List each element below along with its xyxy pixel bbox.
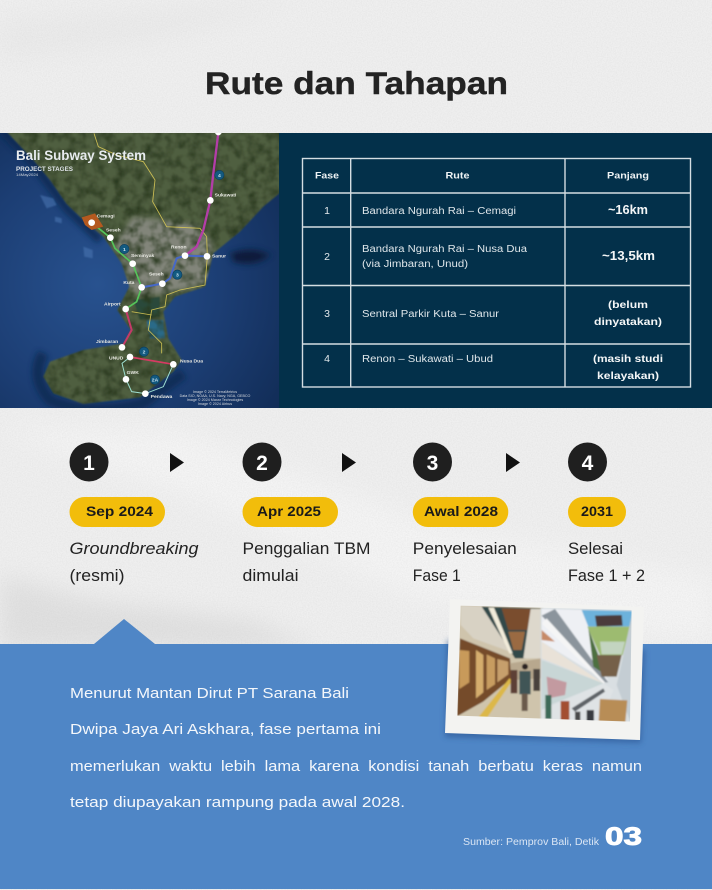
map title: 14May2024 <box>16 173 38 177</box>
map station labels: Nusa Dua <box>180 359 203 365</box>
table lengths: dinyatakan) <box>594 316 662 328</box>
table: route phases <box>302 158 690 387</box>
step 4: fase 1 + 2: Selesai <box>568 540 623 558</box>
paragraph text: Menurut Mantan Dirut PT Sarana Bali <box>70 685 349 702</box>
table header: Rute <box>446 170 470 182</box>
step 4: fase 1 + 2: 4 <box>582 452 594 475</box>
table phase numbers: 2 <box>324 251 330 263</box>
step 3: fase 1: Awal 2028 <box>424 504 499 519</box>
table lengths: kelayakan) <box>597 370 659 382</box>
arrow 3 <box>506 453 520 472</box>
map yellow boundaries <box>94 133 207 353</box>
map station labels: Seseh <box>149 272 164 278</box>
map station dots <box>88 129 222 397</box>
step 3: fase 1: 3 <box>427 452 438 475</box>
map: Bali Subway System: 2 <box>143 350 146 356</box>
map: Bali Subway System: 4 <box>218 173 221 179</box>
table routes: (via Jimbaran, Unud) <box>362 259 468 270</box>
map station labels: Pendawa <box>151 394 173 400</box>
map station labels: Sanur <box>212 254 226 260</box>
map credits: Image © 2024 Airbus <box>198 402 232 406</box>
map title <box>16 148 146 177</box>
map route lines <box>92 133 218 394</box>
map station labels: Seseh <box>106 228 121 234</box>
step 1: groundbreaking: Sep 2024 <box>86 504 154 519</box>
map credits: Data SIO, NOAA, U.S. Navy, NGA, GEBCO <box>180 394 251 398</box>
arrow 2 <box>342 453 356 472</box>
table lengths: ~16km <box>608 202 648 217</box>
table phase numbers: 3 <box>324 308 330 320</box>
table lengths: (belum <box>608 299 648 311</box>
step 4: fase 1 + 2: 2031 <box>581 504 614 519</box>
table routes: Renon – Sukawati – Ubud <box>362 354 493 365</box>
step 3: fase 1: Fase 1 <box>413 567 461 585</box>
map: Bali Subway System: 3 <box>176 273 179 279</box>
step 3: fase 1: Penyelesaian <box>413 540 517 558</box>
photo card <box>445 599 645 743</box>
map: Bali Subway System: 2A <box>152 378 159 384</box>
table phase numbers <box>324 205 330 365</box>
table grid <box>302 158 690 387</box>
map station labels <box>96 193 237 400</box>
step 4: fase 1 + 2: Fase 1 + 2 <box>568 567 645 585</box>
map station labels: GWK <box>127 370 139 376</box>
map title: Bali Subway System <box>16 148 146 163</box>
map orange Cemagi marker <box>82 213 103 230</box>
photo image <box>453 603 633 723</box>
map credits: Image © 2024 Maxar Technologies <box>187 398 243 402</box>
table header: Fase <box>315 170 339 182</box>
step 1: groundbreaking: (resmi) <box>70 567 124 585</box>
source: Sumber: Pemprov Bali, Detik <box>463 837 600 848</box>
arrow 1 <box>170 453 184 472</box>
step 2: TBM: 2 <box>256 452 268 475</box>
map: Bali Subway System <box>0 129 283 410</box>
step 2: TBM: dimulai <box>242 567 298 585</box>
photo shadow <box>445 640 645 743</box>
panel: navy band <box>0 133 712 408</box>
table lengths <box>593 202 663 382</box>
paragraph text: Dwipa Jaya Ari Askhara, fase pertama ini <box>70 721 381 738</box>
map station labels: UNUD <box>109 355 124 361</box>
step 2: TBM: Penggalian TBM <box>242 540 370 558</box>
table routes: Bandara Ngurah Rai – Cemagi <box>362 206 516 217</box>
paragraph text: memerlukan waktu lebih lama karena kondisi tanah berbatu keras namun <box>70 758 642 775</box>
map credits <box>180 390 251 406</box>
table header: Panjang <box>607 170 649 182</box>
map station labels: Renon <box>171 244 187 250</box>
step 3: fase 1 <box>413 442 517 585</box>
step 2: TBM <box>242 442 370 585</box>
map route number badges <box>120 170 224 384</box>
step 2: TBM: Apr 2025 <box>257 504 322 519</box>
panel: blue callout <box>0 619 712 889</box>
map station labels: Kuta <box>123 280 135 286</box>
map station labels: Sukawati <box>215 193 237 199</box>
map station labels: Airport <box>104 302 121 308</box>
step 1: groundbreaking <box>70 442 199 585</box>
table phase numbers: 4 <box>324 353 330 365</box>
table lengths: (masih studi <box>593 353 663 365</box>
map land mass <box>0 130 283 410</box>
map station labels: Jimbaran <box>96 339 118 345</box>
map station labels: Seminyak <box>131 253 155 259</box>
table lengths: ~13,5km <box>602 248 655 263</box>
page number: 03 <box>605 823 642 851</box>
table routes <box>362 206 527 365</box>
map station labels: Cemagi <box>97 214 115 220</box>
paragraph text <box>70 685 642 811</box>
step 1: groundbreaking: Groundbreaking <box>70 540 199 558</box>
map shallow halo around the coast <box>2 130 270 409</box>
title: Rute dan Tahapan <box>205 65 508 101</box>
step 1: groundbreaking: 1 <box>83 452 95 475</box>
table routes: Bandara Ngurah Rai – Nusa Dua <box>362 244 527 255</box>
map credits: Image © 2024 TerraMetrics <box>193 390 237 394</box>
photo white frame <box>445 599 644 740</box>
table header <box>315 170 649 182</box>
timeline <box>70 442 645 585</box>
map title: PROJECT STAGES <box>16 166 74 173</box>
table phase numbers: 1 <box>324 205 330 217</box>
map: Bali Subway System: 1 <box>123 247 126 253</box>
step 4: fase 1 + 2 <box>568 442 645 585</box>
table routes: Sentral Parkir Kuta – Sanur <box>362 309 500 320</box>
paragraph text: tetap diupayakan rampung pada awal 2028. <box>70 794 405 811</box>
